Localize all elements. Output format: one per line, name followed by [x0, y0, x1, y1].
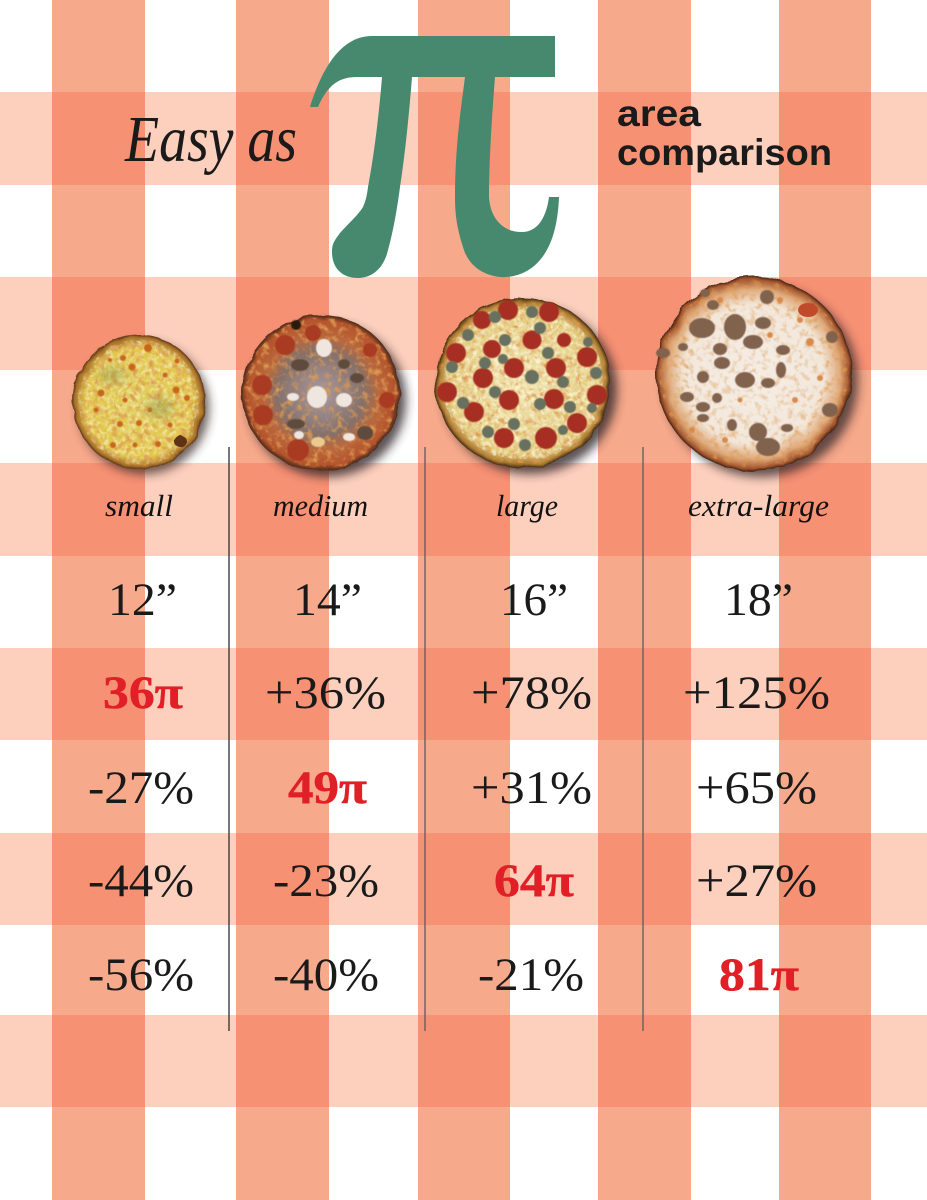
- comparison row: extra-large: -40%: [273, 949, 379, 1001]
- comparison row: medium: [88, 762, 817, 814]
- comparison row: extra-large: 81π: [719, 949, 799, 1001]
- comparison row: small: +125%: [683, 667, 830, 719]
- diameters row: 18”: [724, 574, 793, 626]
- comparison row: large: -44%: [88, 855, 194, 907]
- comparison row: extra-large: [88, 949, 799, 1001]
- size labels: [105, 488, 829, 523]
- comparison row: large: +27%: [696, 855, 817, 907]
- icon: large green pi symbol: [310, 36, 559, 278]
- diameters row: 12”: [108, 574, 177, 626]
- comparison row: medium: +65%: [696, 762, 817, 814]
- pizza: small: [73, 335, 209, 474]
- comparison row: large: 64π: [494, 855, 574, 907]
- comparison row: extra-large: -21%: [478, 949, 584, 1001]
- comparison row: large: -23%: [273, 855, 379, 907]
- comparison row: small: +36%: [265, 667, 386, 719]
- comparison row: small: 36π: [103, 667, 183, 719]
- comparison row: extra-large: -56%: [88, 949, 194, 1001]
- subtitle: area comparison: area: [617, 93, 701, 134]
- diameters row: 14”: [293, 574, 362, 626]
- pizza: medium: [242, 315, 406, 477]
- pizza: extra-large: [656, 277, 858, 477]
- title: Easy as: Easy as: [124, 103, 297, 176]
- subtitle: area comparison: comparison: [617, 132, 832, 173]
- pizza: large: [435, 298, 617, 474]
- comparison row: small: [103, 667, 830, 719]
- diameters row: [108, 574, 793, 626]
- column dividers: [229, 447, 643, 1031]
- size labels: large: [496, 488, 558, 523]
- subtitle: area comparison: [617, 93, 832, 173]
- comparison row: medium: 49π: [288, 762, 367, 814]
- diameters row: 16”: [500, 574, 568, 626]
- comparison row: small: +78%: [471, 667, 592, 719]
- size labels: extra-large: [688, 488, 829, 523]
- comparison row: large: [88, 855, 817, 907]
- size labels: small: [105, 488, 173, 523]
- size labels: medium: [273, 488, 368, 523]
- comparison row: medium: +31%: [471, 762, 592, 814]
- comparison row: medium: -27%: [88, 762, 194, 814]
